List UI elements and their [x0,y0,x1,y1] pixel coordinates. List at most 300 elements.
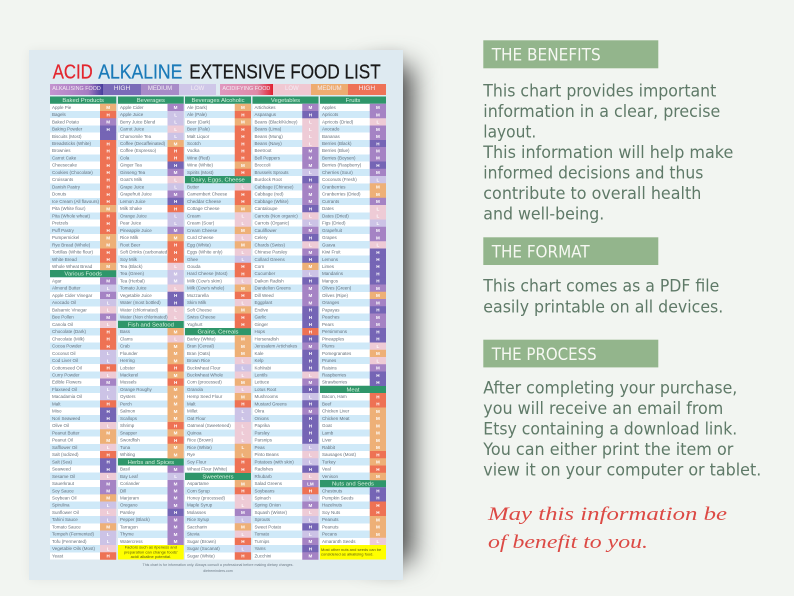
section: baked products: H [107,249,110,255]
section: various foods: L [107,445,110,450]
section: fish and seafood: M [174,416,178,421]
section: sweeteners: H [241,539,245,544]
section: beverages alcoholic: Wine (Red) [187,155,210,160]
section: beverages: L [174,314,177,320]
poster: food list chart [29,50,403,580]
section: vegetables: Zucchini [254,553,271,558]
section: fruits [320,96,386,386]
section: beverages [118,96,184,321]
section: fruits: H [376,257,380,262]
section: various foods: H [107,459,110,464]
section: vegetables: Jerusalem Artichokes [254,343,297,348]
section: beverages alcoholic: Spirits (Most) [187,170,214,175]
section: baked products: Baking Powder [52,126,82,131]
title: ACID [53,61,93,83]
section: meat: Turkey [322,459,336,464]
section: vegetables: H [309,423,312,428]
section: grains, cereals: Buckwheat Whole [187,372,223,377]
section: grains, cereals: H [241,466,245,472]
section: vegetables: Mustard Greens [254,401,287,406]
section: fruits: H [376,271,380,276]
section: various foods: Chocolate (Dark) [52,329,86,334]
footer disclaimer: This chart is for information only. Always consult a professional before making dietary changes. [143,563,293,567]
section: baked products: Pumpernickel [52,235,79,240]
section: beverages: Grape Juice [120,184,144,189]
section: grains, cereals: Grains, Cereals [198,328,238,335]
section: fish and seafood [118,320,184,458]
section: vegetables: Spring Onion [254,503,281,508]
section: beverages: Rice Milk [120,235,138,240]
section: dairy, eggs, cheese: L [241,184,244,190]
section: vegetables: L [309,459,312,464]
section: grains, cereals: Buckwheat Flour [187,365,221,370]
section: vegetables: Cauliflower [254,228,277,233]
section: vegetables: M [308,199,312,204]
footer disclaimer [142,563,294,573]
section: vegetables: H [309,546,312,551]
section: vegetables: H [309,206,312,211]
section: vegetables: Soybeans [254,488,275,493]
section: vegetables: Daikon Radish [254,278,284,283]
section: various foods: H [107,553,110,558]
section: vegetables: Squash (Winter) [254,510,287,515]
section: baked products: Breadsticks (White) [52,141,91,146]
section: fruits: Pears [322,322,334,327]
section: beverages: Tea (Black) [120,264,143,269]
section: vegetables: Potatoes (with skin) [254,459,294,464]
legend: ACIDIFYING FOOD [222,86,270,92]
section: fruits: M [376,314,380,320]
section: fruits: M [376,235,380,240]
section: dairy, eggs, cheese: Milk (Cow's skim) [187,278,222,283]
section: dairy, eggs, cheese: Swiss Cheese [187,314,216,320]
section: grains, cereals: L [241,423,244,428]
section: vegetables: H [309,488,312,493]
section: dairy, eggs, cheese: Skim Milk [187,300,206,305]
section: various foods: L [107,546,110,551]
section: vegetables: Dill Weed [254,293,274,298]
section: baked products: H [107,112,110,117]
section: beverages: L [174,220,177,226]
section: fish and seafood: M [174,445,178,450]
section: baked products: H [107,220,110,226]
section: fruits: Fruits [346,97,360,103]
section: fish and seafood: L [174,336,177,341]
section: various foods: L [107,517,110,522]
section: dairy, eggs, cheese: L [241,249,244,255]
section: baked products: M [106,235,110,240]
section: nuts and seeds: Peanuts [322,517,339,522]
section: meat: Liver [322,437,332,442]
section: grains, cereals: L [241,437,244,443]
section: beverages alcoholic: H [241,170,245,175]
section: fruits: Limes [322,264,334,269]
section: various foods: Soybean Oil [52,495,77,500]
section: vegetables: Eggplant [254,300,272,305]
section: various foods: Chocolate (Milk) [52,336,85,341]
section: vegetables: Hops [254,329,265,334]
section: beverages: H [174,199,177,204]
section: grains, cereals: Brown Rice [187,358,210,363]
section: fruits: Plums [322,343,335,348]
legend [50,84,386,95]
section: herbs and spices: M [174,503,178,508]
section: vegetables: M [308,293,312,298]
section: beverages: H [174,249,177,255]
title: ALKALINE [98,61,182,83]
section: vegetables: Kelp [254,358,264,363]
section: vegetables: H [309,235,312,240]
section: various foods: L [107,510,110,515]
section: dairy, eggs, cheese: Soft Cheese [187,307,212,312]
section: vegetables: M [308,192,312,197]
section: various foods: Soy Sauce [52,488,74,493]
section: dairy, eggs, cheese: H [241,192,245,197]
section: vegetables: Brussels Sprouts [254,170,289,175]
text: benefits: contribute to overall health [483,184,701,203]
section: fruits: Currants [322,199,339,204]
section: sweeteners: L [241,517,244,522]
section: beverages: Water (most bottled) [120,300,161,305]
section: grains, cereals: Malt [187,401,196,406]
section: beverages: Water (chlorinated) [120,307,158,312]
section: various foods: Vegetable Oils (Most) [52,546,95,551]
section: beverages: Cola [120,155,129,160]
section: vegetables: Celery [254,235,268,240]
section: grains, cereals: M [241,336,245,341]
section: fish and seafood: Swordfish [120,437,140,442]
section: various foods: M [106,437,110,443]
section: dairy, eggs, cheese: Egg (White) [187,242,211,247]
section: dairy, eggs, cheese: Gouda [187,264,201,269]
section: nuts and seeds: Pecans [322,532,337,537]
section: various foods: Bee Pollen [52,314,74,320]
section: vegetables: Collard Greens [254,257,285,262]
legend: HIGH [359,85,375,92]
section: fruits: Persimmons [322,329,347,334]
section: vegetables: L [309,495,312,501]
section: fish and seafood: Snapper [120,430,137,435]
section: herbs and spices: M [174,517,178,522]
section: sweeteners: H [241,553,245,558]
text: format [482,277,723,317]
section: sweeteners: H [241,488,245,493]
section: herbs and spices: H [174,510,177,515]
section: various foods: Peanut Butter [52,430,80,435]
section: dairy, eggs, cheese: Cream [187,213,201,218]
section: vegetables: Pinto Beans [254,452,279,457]
section: baked products: Apple Pie [52,105,71,110]
section: fish and seafood: M [174,372,178,378]
section: meat: Goat [322,423,332,428]
section: vegetables: H [309,416,312,421]
section: various foods: M [106,481,110,486]
section: fruits: Prunes [322,358,336,363]
section: baked products: H [107,148,110,153]
section: dairy, eggs, cheese: Butter [187,184,199,189]
section: fruits: M [376,134,380,139]
section: beverages: M [174,235,178,240]
section: beverages: Beverages [137,97,165,103]
section: fruits: M [376,322,380,327]
section: vegetables: L [309,474,312,479]
section: grains, cereals: Barley (White) [187,336,216,341]
section: various foods: L [107,358,110,363]
section: vegetables: M [308,409,312,414]
section: dairy, eggs, cheese: Ghee [187,257,198,262]
section: vegetables: Paprika [254,423,270,428]
section: fruits: Raisins [322,365,337,370]
handwritten closing message: May this information be [487,504,727,525]
section: fish and seafood: M [174,351,178,356]
legend: LOW [285,86,299,92]
section: beverages alcoholic: H [241,134,245,139]
section: fruits: Bananas [322,134,340,139]
section: nuts and seeds: H [376,503,380,508]
section: vegetables: H [309,314,312,320]
section: fruits: Kiwi Fruit [322,249,341,254]
section: herbs and spices: Pepper (Black) [120,517,150,522]
section: herbs and spices: M [174,524,178,530]
section: vegetables: L [309,532,312,537]
section: beverages alcoholic: Scotch [187,141,201,146]
section: fruits: H [376,264,380,269]
section: various foods: M [106,430,110,436]
section: fruits: Oranges [322,300,339,305]
section: baked products: Rye Bread (Whole) [52,242,90,247]
section: baked products: Danish Pastry [52,184,80,189]
section: various foods: L [107,322,110,327]
section: vegetables: L [309,141,312,146]
section: fruits: M [376,351,380,356]
section: fruits: H [376,336,380,341]
section: vegetables: M [308,105,312,110]
section: beverages: L [174,184,177,190]
section: vegetables: Dandelion Greens [254,286,291,291]
section: nuts and seeds: Amaranth Seeds [322,539,356,544]
section: vegetables: H [309,430,312,436]
section: meat: H [376,401,380,407]
section: beverages: Pear Juice [120,220,141,225]
section: nuts and seeds: Chestnuts [322,488,342,493]
section: fish and seafood: Orange Roughy [120,387,152,392]
section: vegetables: Mushrooms [254,394,278,399]
section: fish and seafood: M [174,329,178,334]
section: herbs and spices: M [174,466,178,472]
section: grains, cereals: H [241,401,245,407]
section: baked products: Bagels [52,112,66,117]
section: vegetables: Rhubarb [254,474,272,479]
section: dairy, eggs, cheese: Eggs (White only) [187,249,223,254]
section: nuts and seeds: M [376,524,380,530]
section: baked products: H [107,184,110,190]
section: fruits: M [376,112,380,117]
text: benefits: information in a clear, precise [483,102,720,121]
section: beverages alcoholic: M [241,119,245,124]
section: fish and seafood: Clams [120,336,133,341]
section: fish and seafood: M [174,409,178,414]
legend: MEDIUM [148,86,172,92]
section: various foods: Yeast [52,553,63,558]
section: herbs and spices: M [174,481,178,486]
section: baked products: Biscuits (Most) [52,134,82,139]
section: vegetables: M [308,228,312,233]
section: various foods: Canola Oil [52,322,73,327]
section: herbs and spices: L [174,474,177,479]
section: various foods: Nori Seaweed [52,416,80,421]
section: fruits: Apricots [322,112,338,117]
section: fruits: Berries (Blue) [322,148,350,153]
section: various foods: M [106,278,110,284]
section: vegetables [252,96,318,560]
section: nuts and seeds: Pumpkin Seeds [322,495,354,500]
section: grains, cereals: Hemp Seed Flour [187,394,222,399]
section: nuts and seeds: Hazelnuts [322,503,342,508]
section: beverages: H [174,206,177,211]
section: fish and seafood: M [174,430,178,436]
section: dairy, eggs, cheese: Camembert Cheese [187,192,227,197]
section: vegetables: L [309,213,312,218]
section: fruits: L [376,220,379,226]
section: vegetables: L [309,170,312,175]
section: herbs and spices: Marjoram [120,495,139,500]
section: various foods: Safflower Oil [52,445,77,450]
section: vegetables: Asparagus [254,112,276,117]
section: beverages: Milk Shake [120,206,142,211]
section: fish and seafood: M [174,343,178,349]
section: vegetables: Salad Greens [254,481,282,486]
section: sweeteners [185,472,251,560]
section: sweeteners: Corn Syrup [187,488,210,493]
section: vegetables: Carrots (Organic) [254,220,289,225]
section: various foods: Agar [52,278,62,283]
section: grains, cereals: Granola [187,387,203,392]
section: fruits: Guava [322,242,335,247]
section: fruits: Strawberries [322,380,347,385]
section: vegetables: Garlic [254,314,266,320]
section: fruits: M [376,228,380,233]
section: fruits: Berries (Boysen) [322,155,356,160]
section: sweeteners: Saccharin [187,524,207,529]
section: vegetables: M [308,249,312,255]
section: various foods: L [107,532,110,537]
section: vegetables: Cucumber [254,271,275,276]
section: various foods: Olive Oil [52,423,69,428]
section: vegetables: M [308,503,312,508]
section: fruits: Apricots (Dried) [322,119,353,124]
section: beverages: Pineapple Juice [120,228,152,233]
section: grains, cereals [185,328,251,473]
section: fruits: H [376,307,380,313]
section: beverages: L [174,286,177,291]
section: nuts and seeds: H [376,510,380,515]
section: various foods: L [107,286,110,291]
section: baked products: Baked Potato [52,119,79,124]
section: beverages alcoholic: Vodka [187,148,200,153]
section: herbs and spices: M [174,532,178,537]
section: dairy, eggs, cheese: L [241,213,244,218]
section: beverages: H [174,293,177,298]
section: grains, cereals: L [241,387,244,392]
section: herbs and spices: M [174,495,178,501]
section: nuts and seeds [320,480,386,545]
section: dairy, eggs, cheese: H [241,264,245,269]
section: fruits: M [376,155,380,161]
section: fish and seafood: Salmon [120,409,135,414]
section: vegetables: Cabbage (White) [254,199,289,204]
section: grains, cereals: M [241,380,245,385]
section: vegetables: L [309,445,312,450]
section: fruits: Cherries (Sour) [322,170,353,175]
section: dairy, eggs, cheese: H [241,314,245,320]
section: fruits: H [376,249,380,255]
section: fruits: M [376,286,380,291]
section: beverages: Tea (Herbal) [120,278,145,283]
section: baked products: Cookies (Chocolate) [52,170,93,175]
section: fruits: Grapefruit [322,228,342,233]
section: dairy, eggs, cheese: Cream Cheese [187,228,217,233]
section: various foods: Salt (Sea) [52,459,72,464]
section: various foods: L [107,387,110,392]
section: vegetables: L [309,242,312,247]
section: fruits: Dates (Dried) [322,213,349,218]
section: baked products: Brownies [52,148,71,153]
section: herbs and spices: Parsley [120,510,135,515]
section: sweeteners: L [241,495,244,501]
section: beverages alcoholic: Ale (Pale) [187,112,207,117]
section: beverages alcoholic: H [241,155,245,161]
section: fruits: Cranberries (Dried) [322,192,361,197]
section: vegetables: M [308,300,312,305]
section: vegetables: L [309,510,312,515]
section: baked products: Donuts [52,192,66,197]
section: fruits: Berries (Black) [322,141,352,146]
section: beverages: Apple Juice [120,112,143,117]
section: vegetables: H [309,112,312,117]
section: baked products: H [107,192,110,197]
section: beverages: H [174,242,177,247]
section: fish and seafood: Bass [120,329,130,334]
section: beverages: M [174,105,178,110]
section: fruits: Apples [322,105,336,110]
section: fruits: Avocado [322,126,339,131]
section: herbs and spices: Bay Leaf [120,474,138,479]
section: grains, cereals: L [241,445,244,450]
section: grains, cereals: Oat Flour [187,416,206,421]
section: dairy, eggs, cheese: H [241,322,245,327]
section: fish and seafood: M [174,358,178,363]
section: meat: Venison [322,474,338,479]
section: various foods: M [106,380,110,385]
section: meat: M [376,459,380,464]
section: nuts and seeds: L [376,539,379,544]
section: various foods: L [107,300,110,305]
section: grains, cereals: M [241,394,245,399]
section: meat: Meat [346,386,360,393]
title: EXTENSIVE FOOD LIST [189,61,381,83]
section: vegetables: H [309,177,312,182]
section: vegetables: H [309,524,312,530]
section: fruits: L [376,343,379,349]
section: baked products: H [107,228,110,233]
section: fish and seafood: Shrimp [120,423,134,428]
section: fruits: Pineapples [322,336,344,341]
section: nuts and seeds: M [376,517,380,522]
section: vegetables: H [309,387,312,392]
section: vegetables: L [309,220,312,226]
section: various foods: H [107,401,110,407]
section: meat: Chicken Meat [322,416,350,421]
